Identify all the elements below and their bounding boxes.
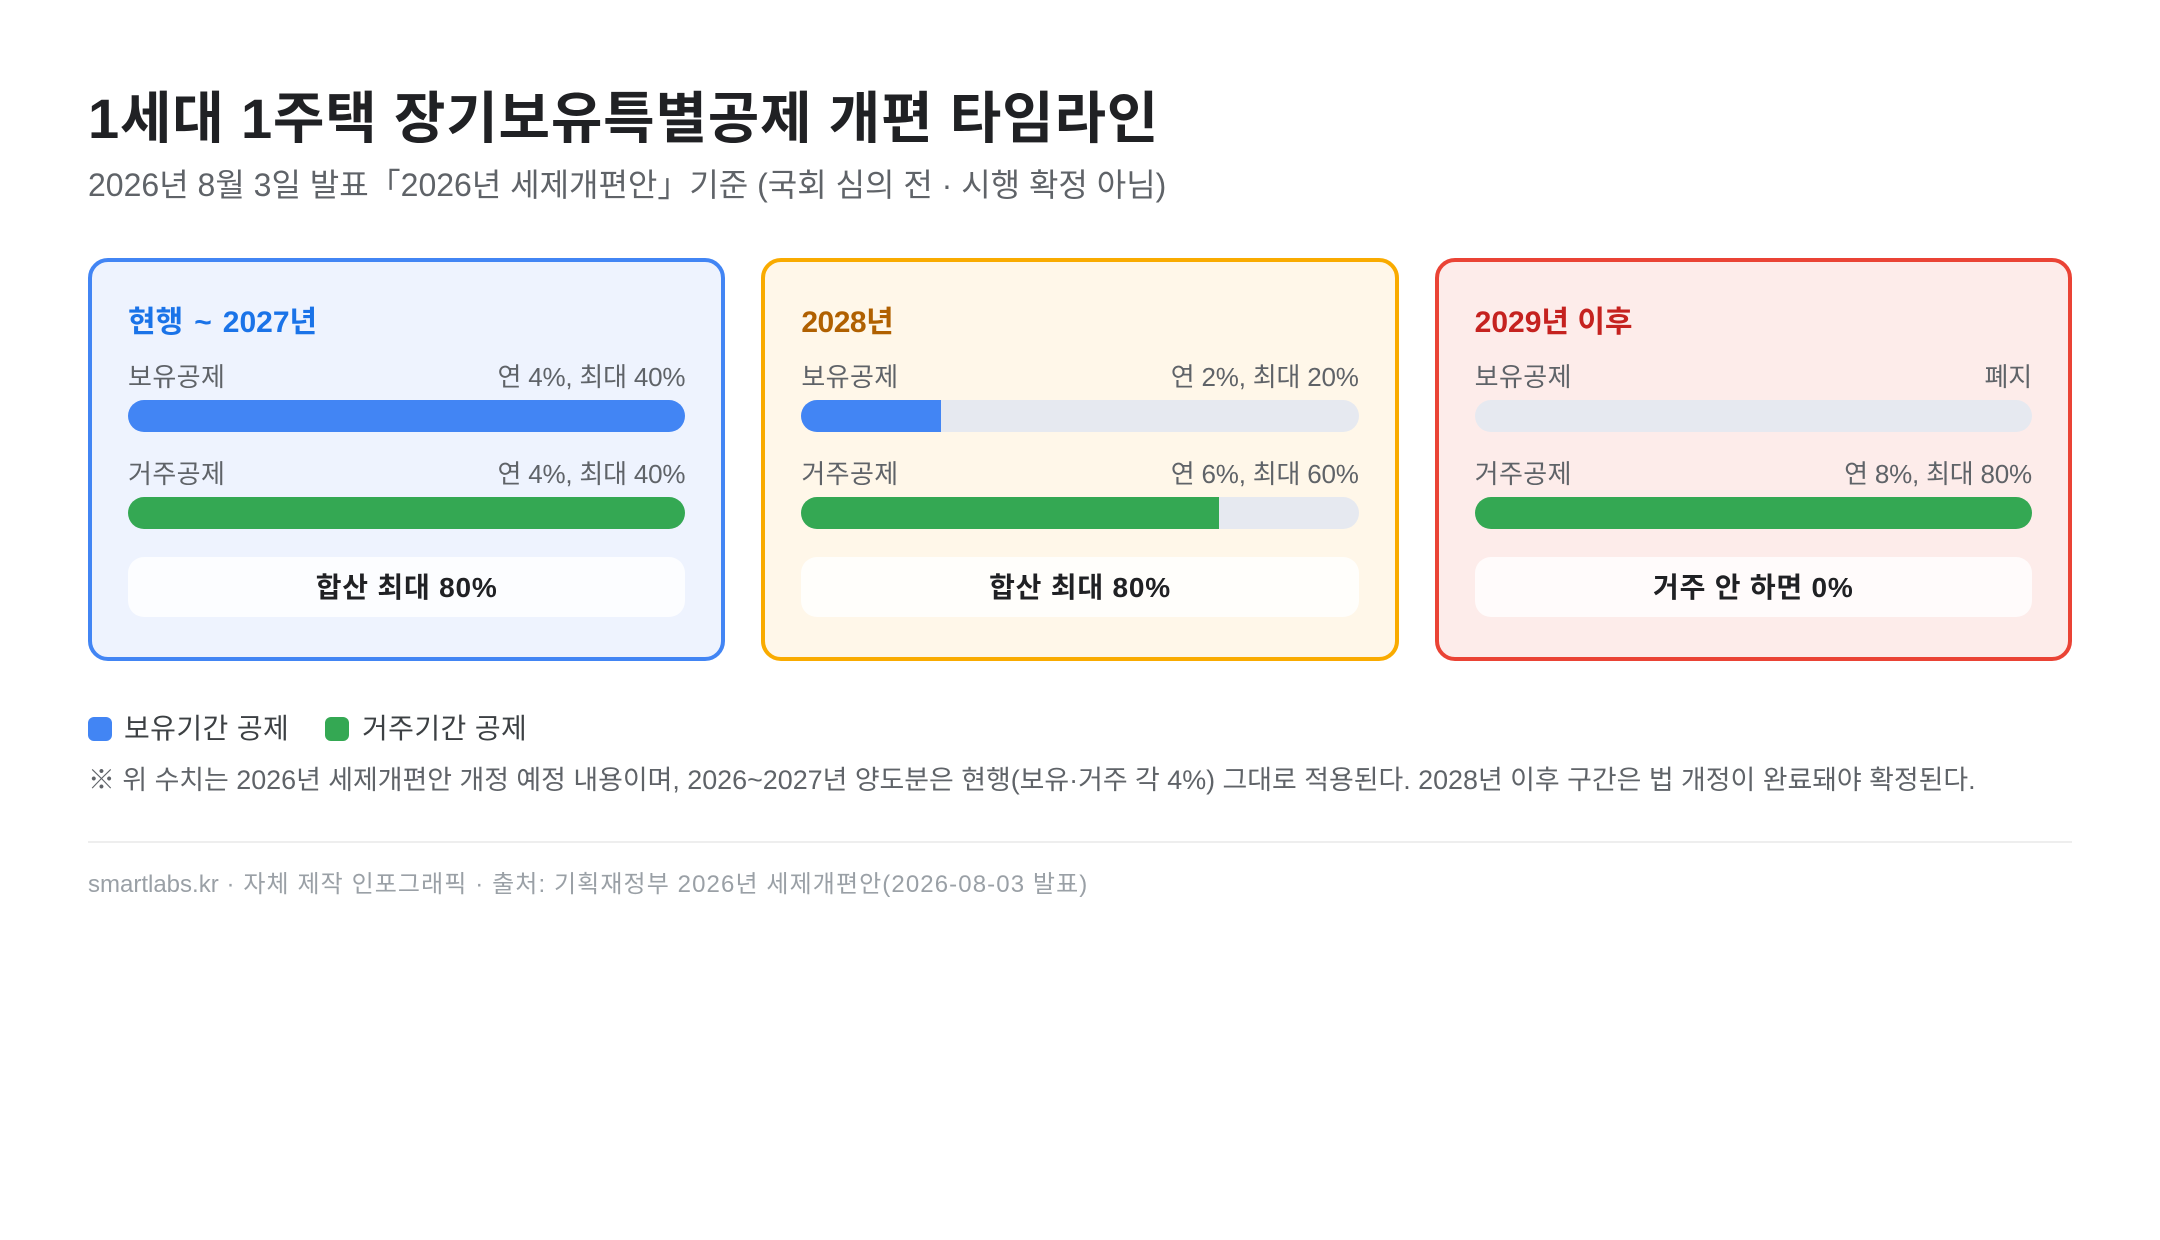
holding deduction bar <box>801 400 1359 432</box>
panel: 2029년 이후 <box>1435 258 2072 661</box>
residence deduction label: 연 6%, 최대 60% <box>1171 459 1359 489</box>
holding deduction label <box>801 362 1359 392</box>
holding deduction label <box>128 362 685 392</box>
callout: 거주 안 하면 0% <box>1653 572 1854 603</box>
note: ※ 위 수치는 2026년 세제개편안 개정 예정 내용이며, 2026~2027년 양도분은 현행(보유·거주 각 4%) 그대로 적용된다. 2028년 이후 구간은 법 개정이 완료돼야 확정된다. <box>88 765 1976 795</box>
holding deduction bar <box>128 400 685 432</box>
title: 1세대 1주택 장기보유특별공제 개편 타임라인 <box>88 87 1159 150</box>
footer source: smartlabs.kr · 자체 제작 인포그래픽 · 출처: 기획재정부 2026년 세제개편안(2026-08-03 발표) <box>88 871 1088 898</box>
panel heading: 2028년 <box>801 306 893 339</box>
residence deduction label <box>128 459 685 489</box>
residence deduction bar <box>801 497 1359 529</box>
legend label: residence: 거주기간 공제 <box>362 713 527 744</box>
residence deduction label: 거주공제 <box>801 459 899 489</box>
combined total callout <box>801 557 1359 617</box>
panel heading: 현행 ~ 2027년 <box>128 306 317 339</box>
panel: 현행 ~ 2027년 <box>88 258 725 661</box>
holding deduction label: 폐지 <box>1985 362 2032 392</box>
combined total callout: 합산 최대 80% <box>316 572 498 603</box>
residence deduction label <box>1475 459 2032 489</box>
residence deduction label <box>801 459 1359 489</box>
combined total callout: 합산 최대 80% <box>989 572 1171 603</box>
residence deduction bar <box>1475 497 2032 529</box>
holding deduction label: 보유공제 <box>128 362 225 392</box>
combined total callout <box>128 557 685 617</box>
holding deduction label: 연 2%, 최대 20% <box>1171 362 1359 392</box>
residence deduction label: 거주공제 <box>1475 459 1572 489</box>
holding deduction label: 연 4%, 최대 40% <box>497 362 685 392</box>
legend swatch: holding <box>88 717 112 741</box>
holding deduction label: 보유공제 <box>801 362 899 392</box>
holding deduction label <box>1475 362 2032 392</box>
panel heading: 2029년 이후 <box>1475 306 1633 339</box>
holding deduction label: 보유공제 <box>1475 362 1572 392</box>
holding deduction bar (empty) <box>1475 400 2032 432</box>
legend label: holding: 보유기간 공제 <box>124 713 289 744</box>
subtitle: 2026년 8월 3일 발표「2026년 세제개편안」기준 (국회 심의 전 · 시행 확정 아님) <box>88 167 1166 203</box>
residence deduction label: 연 8%, 최대 80% <box>1844 459 2032 489</box>
panel: 2028년 <box>761 258 1399 661</box>
legend <box>88 713 527 744</box>
residence deduction label: 거주공제 <box>128 459 225 489</box>
residence deduction bar <box>128 497 685 529</box>
callout <box>1475 557 2032 617</box>
legend swatch: residence <box>325 717 349 741</box>
residence deduction label: 연 4%, 최대 40% <box>497 459 685 489</box>
